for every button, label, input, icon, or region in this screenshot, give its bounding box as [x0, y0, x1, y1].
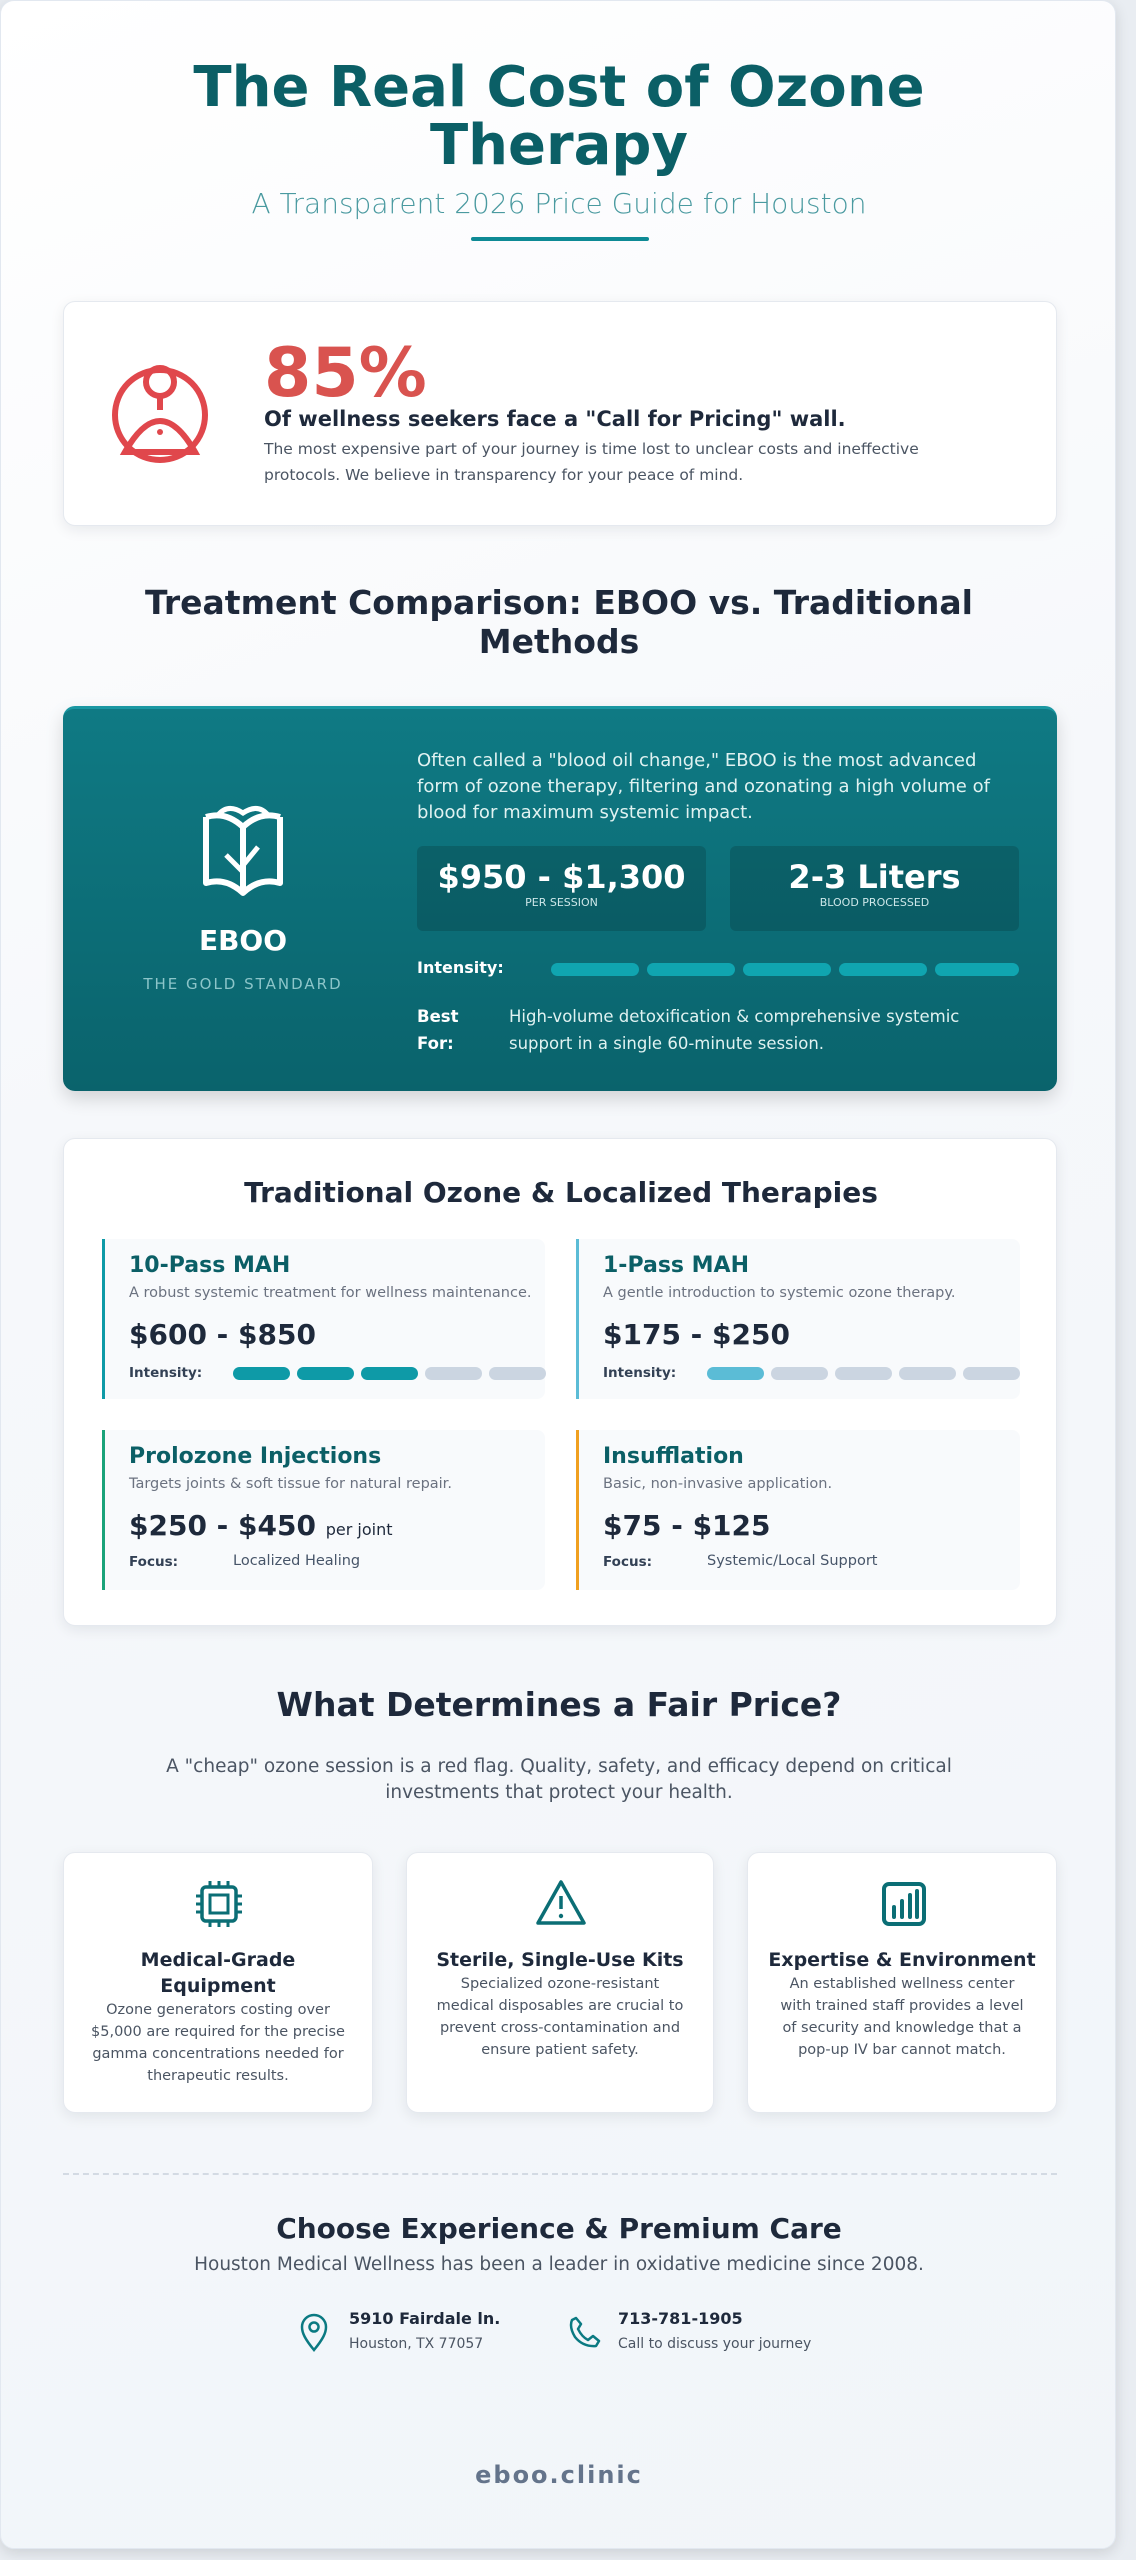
card: insufflation: $75 - $125 — [603, 1509, 770, 1542]
contact: address — [300, 2309, 500, 2352]
factor card: sterile kits: Specialized ozone-resistant medical disposables are crucial to prevent cross-contamination and ensure patient safety. — [437, 1976, 683, 2058]
card: 1-pass MAH: A gentle introduction to systemic ozone therapy. — [603, 1285, 956, 1301]
price box: $950 - $1,300 — [437, 858, 686, 896]
icon: location pin — [300, 2314, 328, 2352]
factor card: equipment — [63, 1852, 373, 2113]
card: 1-pass MAH — [576, 1239, 1020, 1399]
icon: chart — [882, 1882, 926, 1926]
card: 1-pass MAH: Intensity: — [603, 1365, 676, 1381]
stat body: The most expensive part of your journey is time lost to unclear costs and ineffective protocols. We believe in transparency for your peace of mind. — [264, 440, 919, 484]
volume box: 2-3 Liters — [788, 858, 961, 896]
card: insufflation — [576, 1430, 1020, 1590]
title: Therapy — [430, 113, 688, 178]
contact: address: Houston, TX 77057 — [349, 2336, 483, 2352]
best for — [417, 1007, 959, 1053]
section heading: fair price: What Determines a Fair Price? — [277, 1685, 841, 1724]
card: 1-pass MAH: 1-Pass MAH — [603, 1253, 749, 1278]
section heading: comparison: Methods — [479, 622, 639, 661]
title: The Real Cost of Ozone — [193, 55, 925, 120]
panel: EBOO: Best For: — [417, 1007, 458, 1053]
card: prolozone — [102, 1430, 545, 1590]
intensity meter — [417, 958, 1019, 977]
price box — [417, 846, 706, 931]
gold standard tagline: THE GOLD STANDARD — [143, 975, 343, 993]
contact: address: 5910 Fairdale ln. — [349, 2309, 500, 2328]
factor card: sterile kits — [406, 1852, 714, 2113]
card: 10-pass MAH: Intensity: — [129, 1365, 202, 1381]
factor card: equipment: Ozone generators costing over $5,000 are required for the precise gamma concentrations needed for therapeutic results. — [91, 2002, 345, 2084]
card: 10-pass MAH: A robust systemic treatment for wellness maintenance. — [129, 1285, 531, 1301]
intensity meter: Intensity: — [417, 958, 504, 977]
factor card: sterile kits: Sterile, Single-Use Kits — [436, 1949, 684, 1971]
card: 10-pass MAH — [102, 1239, 545, 1399]
contact: phone: Call to discuss your journey — [618, 2336, 811, 2352]
factor card: expertise: An established wellness center with trained staff provides a level of security and knowledge that a pop-up IV bar cannot match. — [780, 1976, 1024, 2058]
closing heading: Choose Experience & Premium Care — [276, 2212, 842, 2245]
contact: phone: 713-781-1905 — [618, 2309, 743, 2328]
card: 1-pass MAH: $175 - $250 — [603, 1318, 790, 1351]
panel: EBOO: High-volume detoxification & comprehensive systemic support in a single 60-minute session. — [509, 1007, 959, 1053]
factor card: expertise: Expertise & Environment — [768, 1949, 1036, 1971]
price box: PER SESSION — [525, 896, 598, 909]
icon: book — [203, 806, 283, 896]
card: prolozone: Focus: — [129, 1554, 178, 1570]
contact: phone — [570, 2309, 811, 2352]
section heading: comparison — [145, 583, 973, 661]
card: insufflation: Basic, non-invasive application. — [603, 1476, 832, 1492]
volume box: BLOOD PROCESSED — [820, 896, 929, 909]
card: insufflation: Focus: — [603, 1554, 652, 1570]
factor card: expertise — [747, 1852, 1057, 2113]
subtitle: A Transparent 2026 Price Guide for Houston — [252, 187, 866, 220]
icon: chip — [196, 1881, 242, 1927]
stat heading: Of wellness seekers face a "Call for Pricing" wall. — [264, 407, 846, 431]
card: insufflation: Systemic/Local Support — [707, 1553, 877, 1569]
fair price intro: A "cheap" ozone session is a red flag. Quality, safety, and efficacy depend on critical investments that protect your health. — [166, 1756, 952, 1803]
card: 10-pass MAH: $600 - $850 — [129, 1318, 316, 1351]
stat card — [63, 301, 1057, 526]
card: prolozone: $250 - $450 per joint — [129, 1509, 392, 1542]
panel heading: Traditional Ozone & Localized Therapies — [244, 1176, 878, 1209]
icon: phone — [570, 2316, 600, 2348]
EBOO label: EBOO — [199, 924, 287, 957]
footer: website: eboo.clinic — [475, 2461, 643, 2489]
factor card: equipment: Medical-Grade Equipment — [141, 1949, 295, 1997]
icon: warning triangle — [536, 1880, 586, 1925]
volume box — [730, 846, 1019, 931]
description: Often called a "blood oil change," EBOO is the most advanced form of ozone therapy, filtering and ozonating a high volume of blood for maximum systemic impact. — [417, 750, 990, 823]
card: insufflation: Insufflation — [603, 1444, 744, 1469]
panel: EBOO — [63, 706, 1057, 1091]
card: 10-pass MAH: 10-Pass MAH — [129, 1253, 290, 1278]
stat number: 85% — [264, 334, 427, 413]
closing text: Houston Medical Wellness has been a leader in oxidative medicine since 2008. — [194, 2254, 924, 2275]
card: prolozone: Targets joints & soft tissue for natural repair. — [129, 1476, 452, 1492]
icon: warning person — [112, 365, 208, 463]
panel: traditional therapies — [63, 1138, 1057, 1626]
title underline — [471, 237, 649, 241]
card: prolozone: Prolozone Injections — [129, 1444, 381, 1469]
title — [193, 55, 925, 178]
card: prolozone: Localized Healing — [233, 1553, 360, 1569]
section heading: comparison: Treatment Comparison: EBOO vs. Traditional — [145, 583, 973, 622]
